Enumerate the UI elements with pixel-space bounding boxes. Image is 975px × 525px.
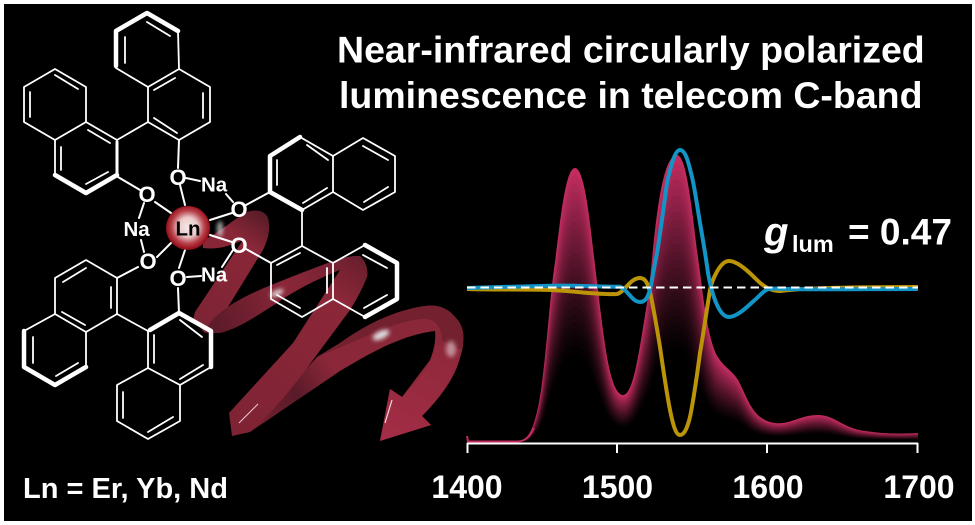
x axis: 1600 bbox=[732, 469, 804, 505]
oxygen atom labels: O bbox=[230, 197, 248, 222]
oxygen atom labels bbox=[138, 165, 248, 291]
title bbox=[337, 28, 925, 116]
spectrum: zero baseline bbox=[467, 286, 918, 288]
caption: lanthanide list: Ln = Er, Yb, Nd bbox=[23, 473, 228, 505]
spectrum: blue CPL curve bbox=[467, 150, 918, 317]
dissymmetry factor label bbox=[763, 210, 952, 257]
dissymmetry factor label: lum bbox=[792, 231, 834, 257]
helical circularly polarized light arrow bbox=[193, 210, 463, 441]
upper binaphthyl bbox=[24, 13, 210, 193]
right binaphthyl bbox=[270, 137, 397, 317]
lower binaphthyl bbox=[24, 260, 211, 439]
coordination bonds bbox=[117, 140, 271, 313]
x axis: 1500 bbox=[582, 469, 653, 505]
oxygen atom labels: O bbox=[230, 233, 248, 258]
spectrum: gold CPL curve bbox=[467, 261, 918, 435]
oxygen atom labels: O bbox=[139, 249, 157, 274]
molecular structure: Ln binaphtholate complex bbox=[24, 13, 397, 439]
title: luminescence in telecom C-band bbox=[339, 74, 922, 116]
dissymmetry factor label: = 0.47 bbox=[848, 212, 952, 252]
lanthanide sphere: Ln bbox=[175, 218, 201, 240]
x axis: 1400 bbox=[431, 469, 503, 505]
oxygen atom labels: O bbox=[169, 165, 187, 190]
sodium atom labels: Na bbox=[201, 174, 228, 196]
sodium atom labels bbox=[124, 174, 228, 286]
dissymmetry factor label: g bbox=[763, 210, 788, 254]
oxygen atom labels: O bbox=[169, 266, 187, 291]
oxygen atom labels: O bbox=[138, 182, 156, 207]
sodium atom labels: Na bbox=[201, 264, 228, 286]
x axis: 1700 bbox=[883, 469, 955, 505]
sodium atom labels: Na bbox=[124, 218, 150, 241]
spectrum: emission band bbox=[467, 155, 918, 443]
title: Near-infrared circularly polarized bbox=[337, 28, 925, 70]
x axis bbox=[431, 443, 955, 505]
lanthanide sphere bbox=[166, 206, 210, 250]
